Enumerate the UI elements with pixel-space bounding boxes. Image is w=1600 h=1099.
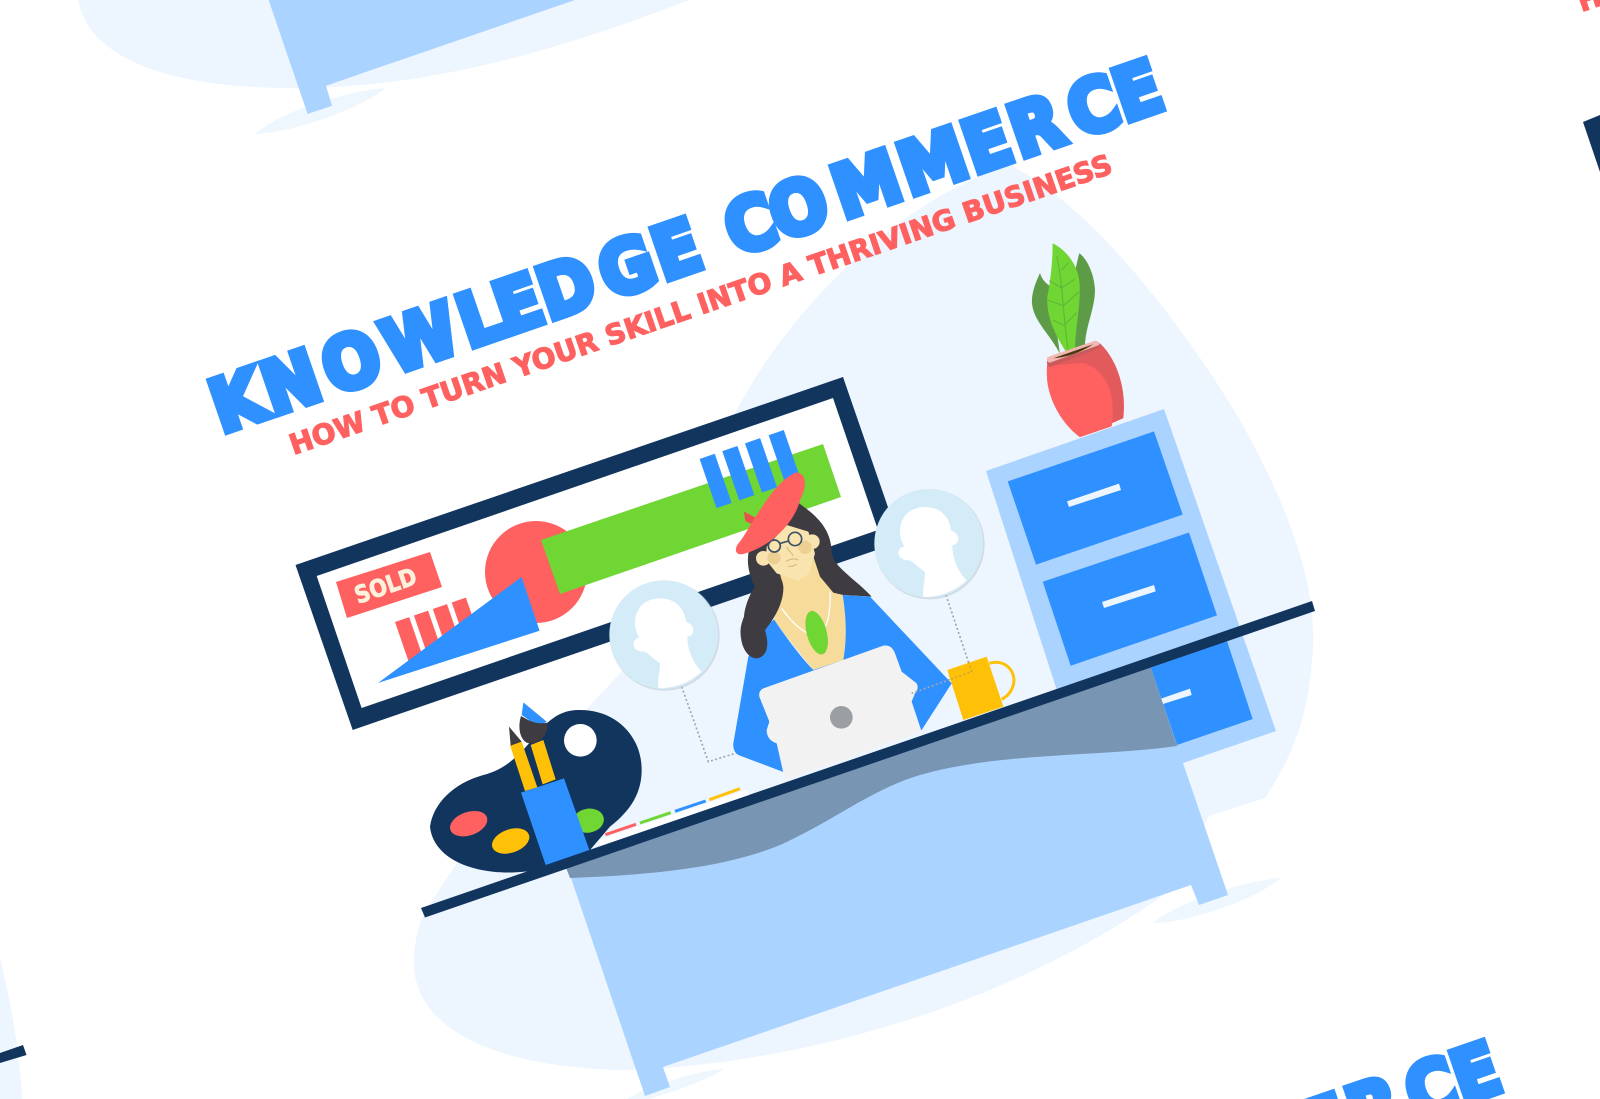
dotted connector left	[682, 687, 773, 762]
left cheek	[767, 551, 781, 564]
left ear	[756, 551, 771, 566]
brush head	[519, 716, 547, 743]
right avatar shadow	[875, 489, 985, 599]
right avatar disc	[874, 489, 983, 598]
tile fragment upper left	[78, 0, 689, 134]
palette hole	[564, 724, 597, 757]
blue triangle	[378, 577, 540, 683]
green paint	[571, 806, 606, 835]
leaf veins	[1048, 256, 1079, 350]
left foot shadow	[627, 1069, 724, 1099]
colour strip red	[605, 824, 636, 835]
tile fragment upper right frame corner	[1583, 115, 1600, 172]
brush tip	[522, 702, 547, 727]
mug handle	[989, 662, 1014, 699]
glasses	[768, 532, 802, 552]
woman and laptop scene	[609, 472, 1014, 780]
upper blob fragment	[78, 0, 689, 88]
colour strip blue	[675, 801, 706, 811]
left avatar	[609, 580, 720, 691]
face	[766, 525, 815, 581]
yellow paint	[489, 824, 533, 858]
pot rim highlight	[1047, 341, 1099, 363]
red paint	[447, 806, 491, 841]
laptop	[759, 645, 922, 780]
drawer 2	[1043, 532, 1217, 666]
brush handle	[531, 740, 556, 784]
background blob	[414, 165, 1313, 1070]
red circle	[485, 521, 587, 623]
left avatar silhouette	[633, 598, 702, 688]
desk top	[421, 601, 1315, 918]
pencil cup	[521, 778, 589, 865]
hair lock	[741, 557, 783, 658]
upper desk leg	[269, 0, 575, 114]
beret	[736, 472, 805, 554]
plant	[1032, 243, 1124, 437]
colour strip yellow	[709, 789, 740, 800]
blue bars	[700, 430, 801, 508]
dotted connector right	[912, 595, 972, 693]
mug dotted overlay	[948, 662, 972, 680]
white strip	[599, 789, 749, 846]
right avatar	[874, 489, 985, 599]
pencil tip	[509, 727, 522, 746]
laptop logo	[830, 706, 853, 729]
green bar	[541, 444, 841, 594]
lower left blob fragment	[0, 958, 22, 1099]
left avatar disc	[609, 580, 718, 689]
filing cabinet	[986, 409, 1276, 763]
pot rim	[1047, 343, 1101, 367]
neck and chest	[774, 557, 846, 670]
pot shade	[1047, 343, 1124, 437]
hair back	[748, 502, 872, 597]
right avatar silhouette	[898, 507, 967, 597]
red bars	[395, 598, 482, 667]
jacket	[733, 595, 952, 772]
drawer 1 handle	[1067, 484, 1121, 507]
sold text: SOLD	[351, 562, 420, 610]
drawer 3	[1110, 641, 1253, 760]
wall frame chart	[296, 377, 900, 730]
palette, brushes and strips	[430, 702, 749, 873]
frame inner	[317, 398, 878, 708]
right foot shadow	[1153, 878, 1281, 923]
pot body	[1047, 363, 1113, 437]
drawer 1	[1008, 431, 1183, 565]
necklace	[782, 592, 830, 633]
main illustration	[296, 165, 1315, 1099]
pencil	[510, 742, 537, 791]
cabinet body	[986, 409, 1276, 763]
right cheek	[798, 541, 812, 554]
centre leaf	[1047, 243, 1080, 353]
hat bow	[744, 512, 760, 527]
drawer 2 handle	[1102, 585, 1156, 608]
mug	[947, 657, 1003, 720]
palette	[430, 710, 642, 873]
tile fragment lower left	[0, 958, 26, 1099]
drawer 3 handle	[1161, 689, 1192, 704]
desk body	[570, 665, 1228, 1096]
mouth and nose	[786, 547, 798, 566]
left dark leaf	[1032, 273, 1060, 354]
left avatar shadow	[610, 581, 720, 691]
soil	[1053, 344, 1093, 358]
right dark leaf	[1075, 253, 1095, 349]
colour strip green	[640, 813, 671, 823]
subtitle: HOW TO TURN YOUR SKILL INTO A THRIVING BUSINESS	[285, 148, 1116, 462]
title: KNOWLEDGE COMMERCE	[199, 44, 1173, 450]
desk shadow	[565, 665, 1177, 878]
upper foot shadow	[255, 88, 386, 134]
lower left desk end	[0, 1045, 26, 1063]
right ear	[805, 534, 820, 549]
sold tag	[336, 552, 442, 618]
frame outer	[296, 377, 900, 730]
pendant	[801, 609, 832, 657]
